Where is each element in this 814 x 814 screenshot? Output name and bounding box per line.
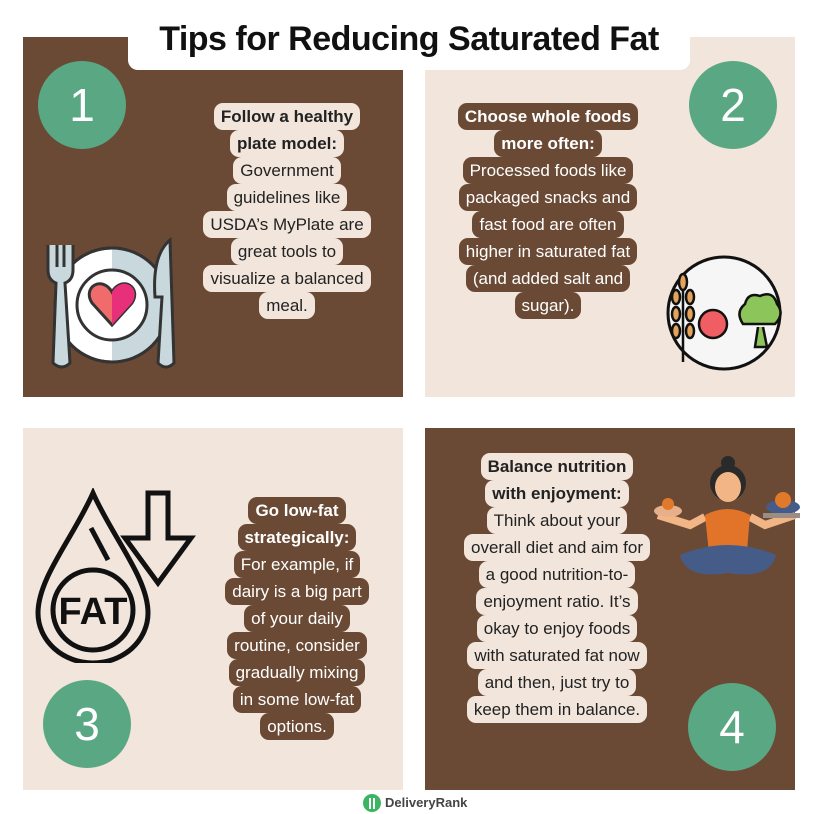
text: tip 3: dairy is a big part: [232, 582, 362, 601]
text: tip 2: Processed foods like: [470, 161, 626, 180]
text: tip 1: Follow a healthy: [221, 107, 353, 126]
text: tip 2: packaged snacks and: [466, 188, 630, 207]
text: tip 1: great tools to: [238, 242, 336, 261]
text: tip 3: [225, 497, 369, 740]
text: tip 1: visualize a balanced: [210, 269, 364, 288]
title: Tips for Reducing Saturated Fat: [159, 20, 659, 58]
text: tip 4: and then, just try to: [485, 673, 629, 692]
text: tip 4: [464, 453, 650, 723]
text: tip 3: strategically:: [245, 528, 349, 547]
text: tip 1: guidelines like: [234, 188, 340, 207]
icon: woman balancing food: [654, 456, 800, 574]
icon: fat drop with down arrow: [36, 488, 196, 663]
text: tip 4: overall diet and aim for: [471, 538, 643, 557]
text: tip 4: keep them in balance.: [474, 700, 640, 719]
text: tip 4: with enjoyment:: [492, 484, 622, 503]
text: tip 2: (and added salt and: [473, 269, 623, 288]
text: tip 2: [458, 103, 638, 319]
number 4: 4: [719, 701, 745, 753]
panel 2: [425, 37, 795, 397]
logo: DeliveryRank: DeliveryRank: [385, 795, 467, 810]
text: tip 2: sugar).: [522, 296, 574, 315]
number 4: [688, 683, 776, 771]
number 2: 2: [720, 79, 746, 131]
text: tip 2: higher in saturated fat: [466, 242, 630, 261]
panel 1: [23, 37, 403, 397]
text: tip 1: meal.: [266, 296, 308, 315]
text: tip 2: more often:: [501, 134, 595, 153]
logo: DeliveryRank: [363, 794, 468, 812]
text: tip 4: Think about your: [494, 511, 620, 530]
number 1: 1: [69, 79, 95, 131]
text: tip 4: okay to enjoy foods: [484, 619, 630, 638]
text: tip 3: gradually mixing: [236, 663, 358, 682]
number 1: [38, 61, 126, 149]
text: tip 4: a good nutrition-to-: [486, 565, 628, 584]
icon: fat drop with down arrow: FAT: [59, 591, 127, 633]
text: tip 4: Balance nutrition: [488, 457, 626, 476]
number 3: 3: [74, 698, 100, 750]
text: tip 1: [203, 103, 371, 319]
icon: plate with heart: [46, 237, 176, 369]
text: tip 3: in some low-fat: [240, 690, 354, 709]
text: tip 1: USDA’s MyPlate are: [210, 215, 364, 234]
panel 4: [425, 428, 795, 790]
text: tip 3: options.: [267, 717, 327, 736]
text: tip 2: Choose whole foods: [465, 107, 631, 126]
text: tip 2: fast food are often: [479, 215, 617, 234]
text: tip 4: with saturated fat now: [474, 646, 640, 665]
text: tip 3: of your daily: [251, 609, 343, 628]
panel 3: [23, 428, 403, 790]
text: tip 1: plate model:: [237, 134, 337, 153]
icon: whole foods plate: [666, 256, 782, 370]
text: tip 4: enjoyment ratio. It’s: [483, 592, 631, 611]
text: tip 1: Government: [240, 161, 334, 180]
number 3: [43, 680, 131, 768]
text: tip 3: For example, if: [241, 555, 353, 574]
title: [128, 8, 690, 70]
text: tip 3: Go low-fat: [255, 501, 339, 520]
number 2: [689, 61, 777, 149]
text: tip 3: routine, consider: [234, 636, 360, 655]
